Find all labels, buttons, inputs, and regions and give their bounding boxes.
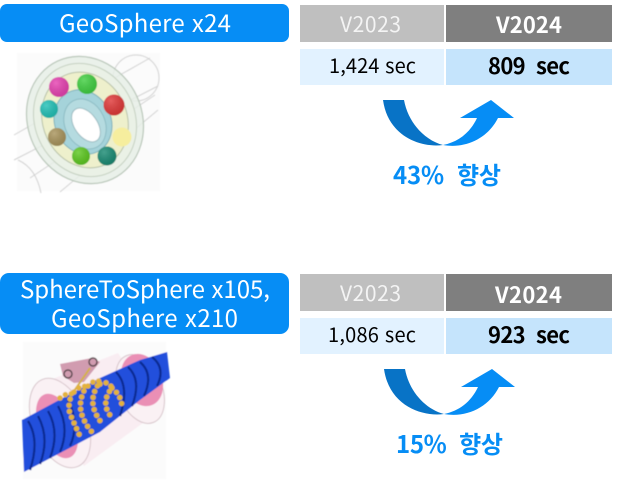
heading: GeoSphere x24: GeoSphere x24 xyxy=(59,4,231,39)
comparison table xyxy=(300,274,612,354)
header: V2024 xyxy=(446,274,612,311)
heading: SphereToSphere x105, GeoSphere x210: SphereToSphere x105, xyxy=(20,270,270,305)
header: V2024: V2024 xyxy=(495,8,562,40)
header: V2023 xyxy=(300,5,444,42)
header: V2023: V2023 xyxy=(340,9,401,39)
value: 809 sec xyxy=(446,49,612,85)
value: 1,086 sec xyxy=(300,318,444,354)
header: V2023 xyxy=(300,274,444,311)
illustration: ball screw model xyxy=(17,342,174,479)
header: V2024 xyxy=(446,5,612,42)
heading: GeoSphere x24 xyxy=(0,4,289,42)
illustration: ball bearing model xyxy=(6,37,164,203)
value: 1,086 sec: 1,086 sec xyxy=(328,319,416,348)
header: V2023: V2023 xyxy=(340,278,401,308)
callout: 15% 향상: 15% 향상 xyxy=(396,425,503,460)
heading: SphereToSphere x105, GeoSphere x210 xyxy=(0,270,289,334)
header: V2024: V2024 xyxy=(494,278,562,310)
value: 1,424 sec: 1,424 sec xyxy=(329,50,416,79)
arrow: improvement xyxy=(383,100,514,146)
panel: SphereToSphere x105, GeoSphere x210 benchmark xyxy=(0,270,612,479)
value: 923 sec: 923 sec xyxy=(488,318,570,350)
callout: 43% 향상: 43% 향상 xyxy=(393,156,501,191)
value: 1,424 sec xyxy=(300,49,444,85)
recirculation tube xyxy=(60,358,100,383)
heading: SphereToSphere x105, GeoSphere x210: GeoSphere x210 xyxy=(51,299,238,334)
arrow: improvement xyxy=(384,369,515,415)
comparison table xyxy=(300,5,612,85)
value: 809 sec: 809 sec xyxy=(488,49,570,81)
panel: GeoSphere x24 benchmark xyxy=(0,4,612,203)
value: 923 sec xyxy=(446,318,612,354)
